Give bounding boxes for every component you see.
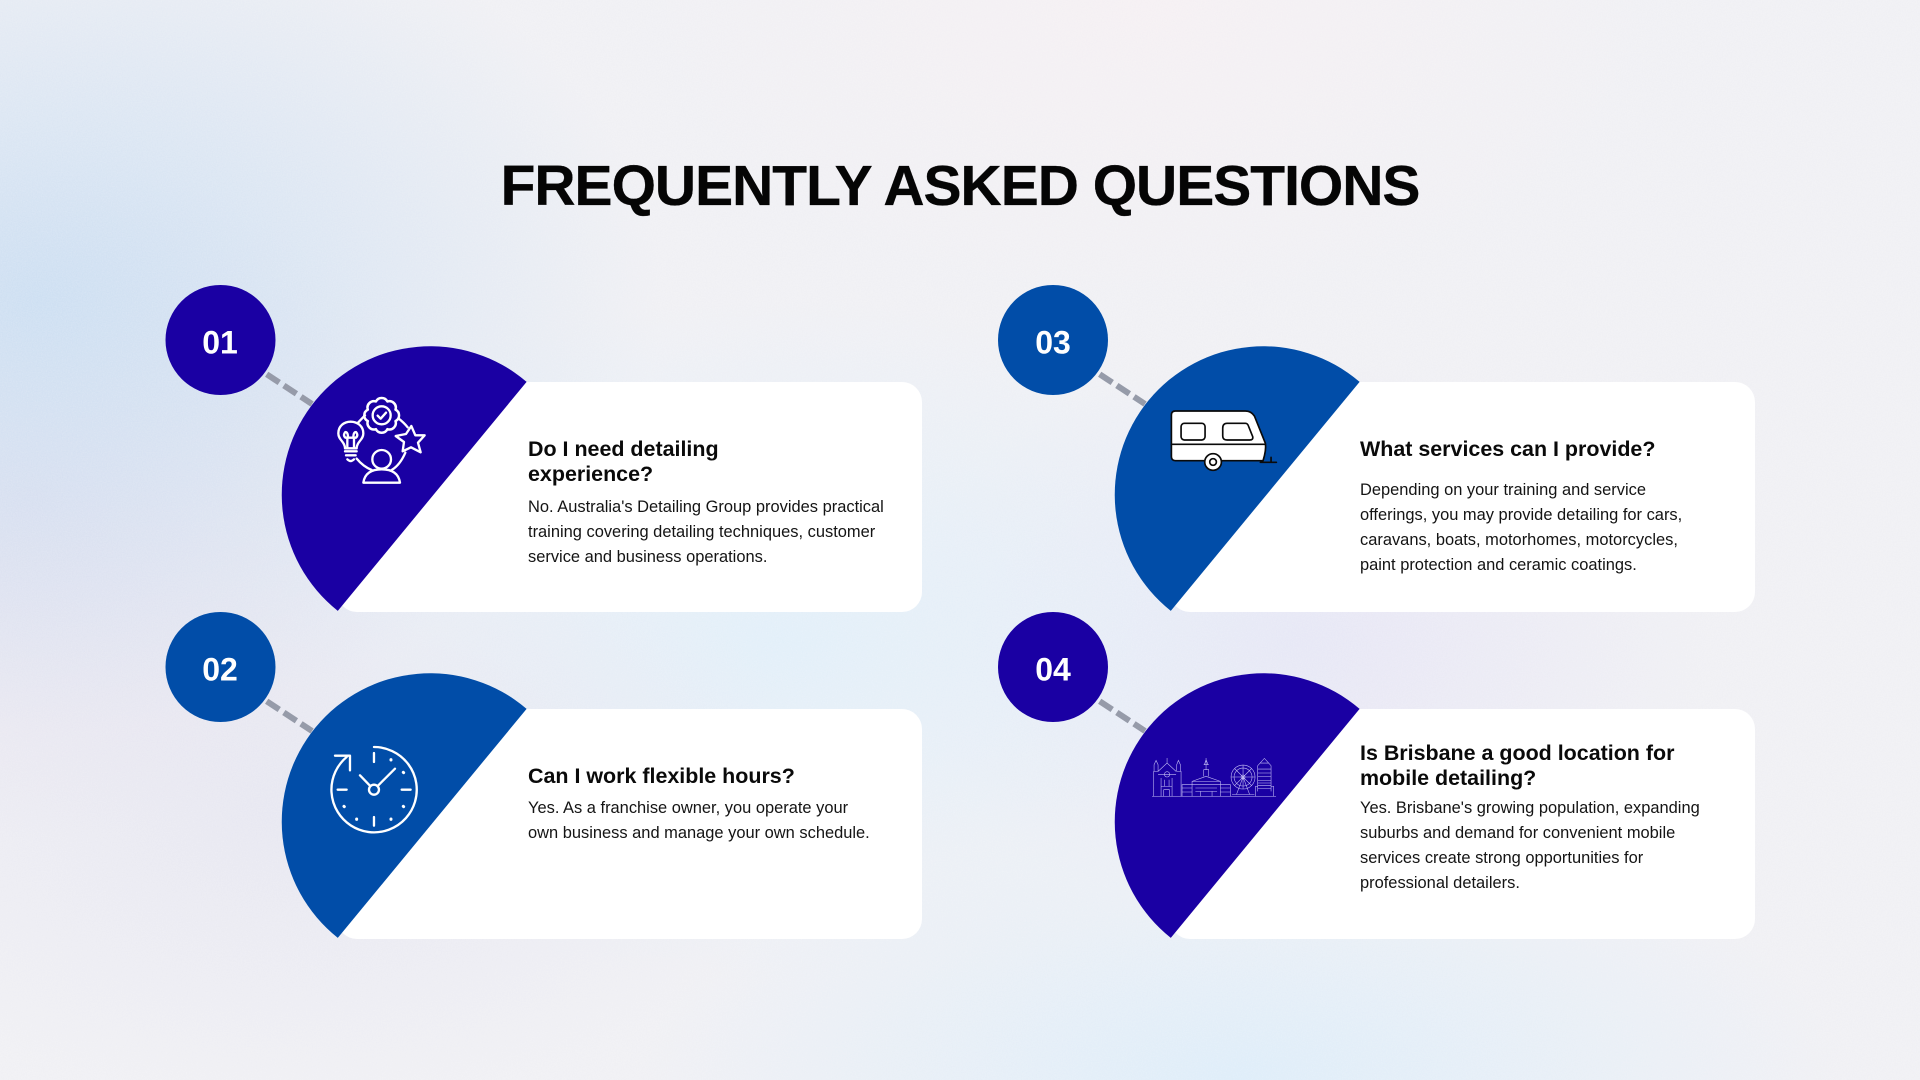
number badge 03: 03 xyxy=(1035,324,1070,360)
icon: Brisbane skyline xyxy=(1152,758,1276,797)
panel: question 04 xyxy=(998,612,1755,939)
number badge 02: 02 xyxy=(202,652,238,688)
answer text xyxy=(1360,480,1682,574)
panel: question 03 xyxy=(998,285,1755,612)
number badge 02 xyxy=(166,612,276,722)
question heading: Is Brisbane a good location for xyxy=(1360,741,1674,765)
answer text: Depending on your training and service xyxy=(1360,480,1646,498)
answer text: No. Australia's Detailing Group provides practical xyxy=(528,498,884,516)
answer text: service and business operations. xyxy=(528,548,767,566)
question heading: experience? xyxy=(528,462,653,486)
answer text: Yes. As a franchise owner, you operate your xyxy=(528,799,848,817)
answer text: services create strong opportunities for xyxy=(1360,849,1643,867)
answer text: Yes. Brisbane's growing population, expanding xyxy=(1360,799,1700,817)
answer text xyxy=(1360,799,1700,892)
answer text: offerings, you may provide detailing for cars, xyxy=(1360,506,1682,524)
question heading xyxy=(528,437,719,486)
number badge 03 xyxy=(998,285,1108,395)
icon: caravan xyxy=(1171,411,1276,470)
title: FREQUENTLY ASKED QUESTIONS xyxy=(501,154,1419,218)
question heading: Do I need detailing xyxy=(528,437,719,461)
answer text: caravans, boats, motorhomes, motorcycles, xyxy=(1360,530,1678,548)
question heading xyxy=(1360,741,1674,790)
answer text: own business and manage your own schedule. xyxy=(528,824,870,842)
number badge 01 xyxy=(166,285,276,395)
answer text xyxy=(528,799,870,842)
answer text: training covering detailing techniques, customer xyxy=(528,522,875,540)
panel: question 01 xyxy=(166,285,922,612)
question heading: What services can I provide? xyxy=(1360,437,1655,461)
answer text xyxy=(528,498,884,566)
question heading: Can I work flexible hours? xyxy=(528,764,795,788)
icon: clock with arrow xyxy=(331,747,417,833)
number badge 04: 04 xyxy=(1035,652,1071,688)
answer text: professional detailers. xyxy=(1360,874,1520,892)
number badge 01: 01 xyxy=(202,324,238,360)
number badge 04 xyxy=(998,612,1108,722)
panel: question 02 xyxy=(166,612,922,939)
answer text: paint protection and ceramic coatings. xyxy=(1360,556,1637,574)
answer text: suburbs and demand for convenient mobile xyxy=(1360,824,1675,842)
question heading: mobile detailing? xyxy=(1360,766,1536,790)
icon: ideas, gear, star and person xyxy=(338,398,425,483)
